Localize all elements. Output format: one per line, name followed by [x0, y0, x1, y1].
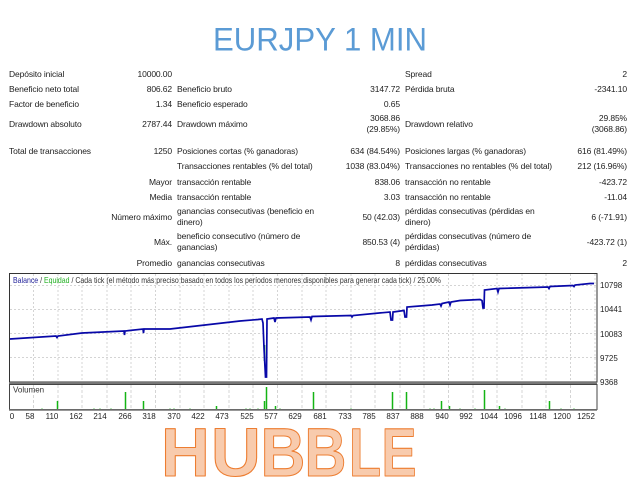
time axis labels: 888: [410, 412, 424, 421]
price axis labels: 9725: [600, 354, 618, 363]
time axis labels: 370: [167, 412, 181, 421]
row: media: 3.03: [384, 192, 400, 202]
row: media: [149, 192, 627, 202]
row: factor de beneficio: [9, 99, 400, 109]
volume bars: [58, 387, 550, 409]
row: número máximo: pérdidas consecutivas (pérdidas en: [405, 206, 535, 216]
row: drawdown: Drawdown máximo: [177, 119, 247, 129]
row: número máximo: dinero): [405, 216, 431, 226]
time axis labels: 266: [118, 412, 132, 421]
price axis labels: 10083: [600, 330, 623, 339]
row: factor de beneficio: 1.34: [156, 99, 172, 109]
price axis labels: 10441: [600, 305, 623, 314]
time axis labels: 940: [435, 412, 449, 421]
row: beneficio neto: 3147.72: [370, 84, 400, 94]
row: beneficio neto: -2341.10: [594, 84, 627, 94]
row: número máximo: Número máximo: [111, 212, 172, 222]
row: drawdown: 3068.86: [370, 113, 400, 123]
row: beneficio neto: [9, 84, 627, 94]
row: media: Media: [149, 192, 172, 202]
row: depósito inicial: 2: [622, 69, 627, 79]
time axis labels: 992: [459, 412, 473, 421]
price axis labels: [600, 281, 623, 387]
row: número máximo: ganancias consecutivas (beneficio en: [177, 206, 314, 216]
row: número máximo: [111, 206, 627, 226]
row: promedio: 2: [622, 258, 627, 268]
row: beneficio neto: Beneficio neto total: [9, 84, 79, 94]
row: drawdown: Drawdown relativo: [405, 119, 473, 129]
row: promedio: [137, 258, 627, 268]
time axis labels: 1044: [480, 412, 498, 421]
row: factor de beneficio: Factor de beneficio: [9, 99, 79, 109]
time axis labels: 58: [26, 412, 35, 421]
row: transacciones rentables: 1038 (83.04%): [346, 161, 400, 171]
row: depósito inicial: Depósito inicial: [9, 69, 64, 79]
volume panel: [9, 383, 597, 410]
price axis labels: 10798: [600, 281, 623, 290]
title: EURJPY 1 MIN: [213, 22, 427, 58]
time axis labels: 1252: [577, 412, 595, 421]
stats table: [9, 69, 627, 268]
row: total de transacciones: Posiciones cortas (% ganadoras): [177, 146, 298, 156]
row: drawdown: 2787.44: [142, 119, 172, 129]
time axis labels: 0: [10, 412, 15, 421]
chart legend text: Balance / Equidad / Cada tick (el método más preciso basado en todos los períodos menores disponibles para generar cada tick) / 25.00%: [13, 275, 441, 285]
time axis labels: 1200: [553, 412, 571, 421]
row: promedio: Promedio: [137, 258, 172, 268]
row: mayor: -423.72: [599, 177, 627, 187]
time axis labels: 473: [215, 412, 229, 421]
row: máximo consecutivo: [154, 231, 627, 252]
row: número máximo: 6 (-71.91): [591, 212, 627, 222]
row: total de transacciones: 634 (84.54%): [350, 146, 400, 156]
row: número máximo: 50 (42.03): [362, 212, 400, 222]
row: media: -11.04: [604, 192, 627, 202]
row: total de transacciones: 1250: [154, 146, 172, 156]
time axis labels: 1096: [504, 412, 522, 421]
time axis labels: 525: [240, 412, 254, 421]
time axis labels: 681: [313, 412, 327, 421]
row: total de transacciones: Posiciones largas (% ganadoras): [405, 146, 526, 156]
row: mayor: [149, 177, 627, 187]
row: transacciones rentables: 212 (16.96%): [577, 161, 627, 171]
row: promedio: pérdidas consecutivas: [405, 258, 487, 268]
time axis labels: 629: [288, 412, 302, 421]
row: factor de beneficio: Beneficio esperado: [177, 99, 248, 109]
row: total de transacciones: 616 (81.49%): [577, 146, 627, 156]
row: media: transacción rentable: [177, 192, 251, 202]
row: depósito inicial: Spread: [405, 69, 432, 79]
row: mayor: 838.06: [375, 177, 400, 187]
row: transacciones rentables: [177, 161, 627, 171]
row: total de transacciones: [9, 146, 627, 156]
row: transacciones rentables: Transacciones rentables (% del total): [177, 161, 313, 171]
time axis labels: 577: [264, 412, 278, 421]
row: drawdown: 29.85%: [599, 113, 627, 123]
time axis labels: 837: [386, 412, 400, 421]
row: máximo consecutivo: ganancias): [177, 242, 217, 252]
row: máximo consecutivo: 850.53 (4): [362, 237, 400, 247]
time axis labels: 785: [362, 412, 376, 421]
volume panel: Volumen: [13, 386, 44, 394]
price axis labels: 9368: [600, 378, 618, 387]
row: número máximo: dinero): [177, 216, 203, 226]
row: máximo consecutivo: pérdidas consecutivas (número de: [405, 231, 531, 241]
row: máximo consecutivo: pérdidas): [405, 242, 439, 252]
row: máximo consecutivo: beneficio consecutivo (número de: [177, 231, 300, 241]
time axis labels: 214: [93, 412, 107, 421]
time axis labels: 162: [69, 412, 83, 421]
time axis labels: 110: [46, 412, 59, 421]
row: máximo consecutivo: Máx.: [154, 237, 172, 247]
equity line: [264, 345, 266, 361]
time axis labels: 733: [338, 412, 352, 421]
row: total de transacciones: Total de transacciones: [9, 146, 91, 156]
row: beneficio neto: 806.62: [147, 84, 172, 94]
row: promedio: ganancias consecutivas: [177, 258, 265, 268]
row: drawdown: Drawdown absoluto: [9, 119, 82, 129]
balance line: [10, 284, 594, 377]
time axis labels: 318: [142, 412, 156, 421]
row: mayor: transacción no rentable: [405, 177, 491, 187]
row: promedio: 8: [395, 258, 400, 268]
row: transacciones rentables: Transacciones no rentables (% del total): [405, 161, 552, 171]
chart frame: [10, 274, 597, 382]
row: drawdown: (3068.86): [592, 124, 627, 134]
row: factor de beneficio: 0.65: [384, 99, 400, 109]
row: depósito inicial: 10000.00: [138, 69, 172, 79]
row: mayor: transacción rentable: [177, 177, 251, 187]
row: depósito inicial: [9, 69, 627, 79]
row: beneficio neto: Pérdida bruta: [405, 84, 454, 94]
row: drawdown: (29.85%): [366, 124, 400, 134]
time axis labels: [10, 412, 595, 421]
row: media: transacción no rentable: [405, 192, 491, 202]
row: máximo consecutivo: -423.72 (1): [587, 237, 627, 247]
row: drawdown: [9, 113, 627, 134]
row: mayor: Mayor: [149, 177, 172, 187]
time axis labels: 422: [191, 412, 205, 421]
time axis labels: 1148: [529, 412, 547, 421]
row: beneficio neto: Beneficio bruto: [177, 84, 232, 94]
